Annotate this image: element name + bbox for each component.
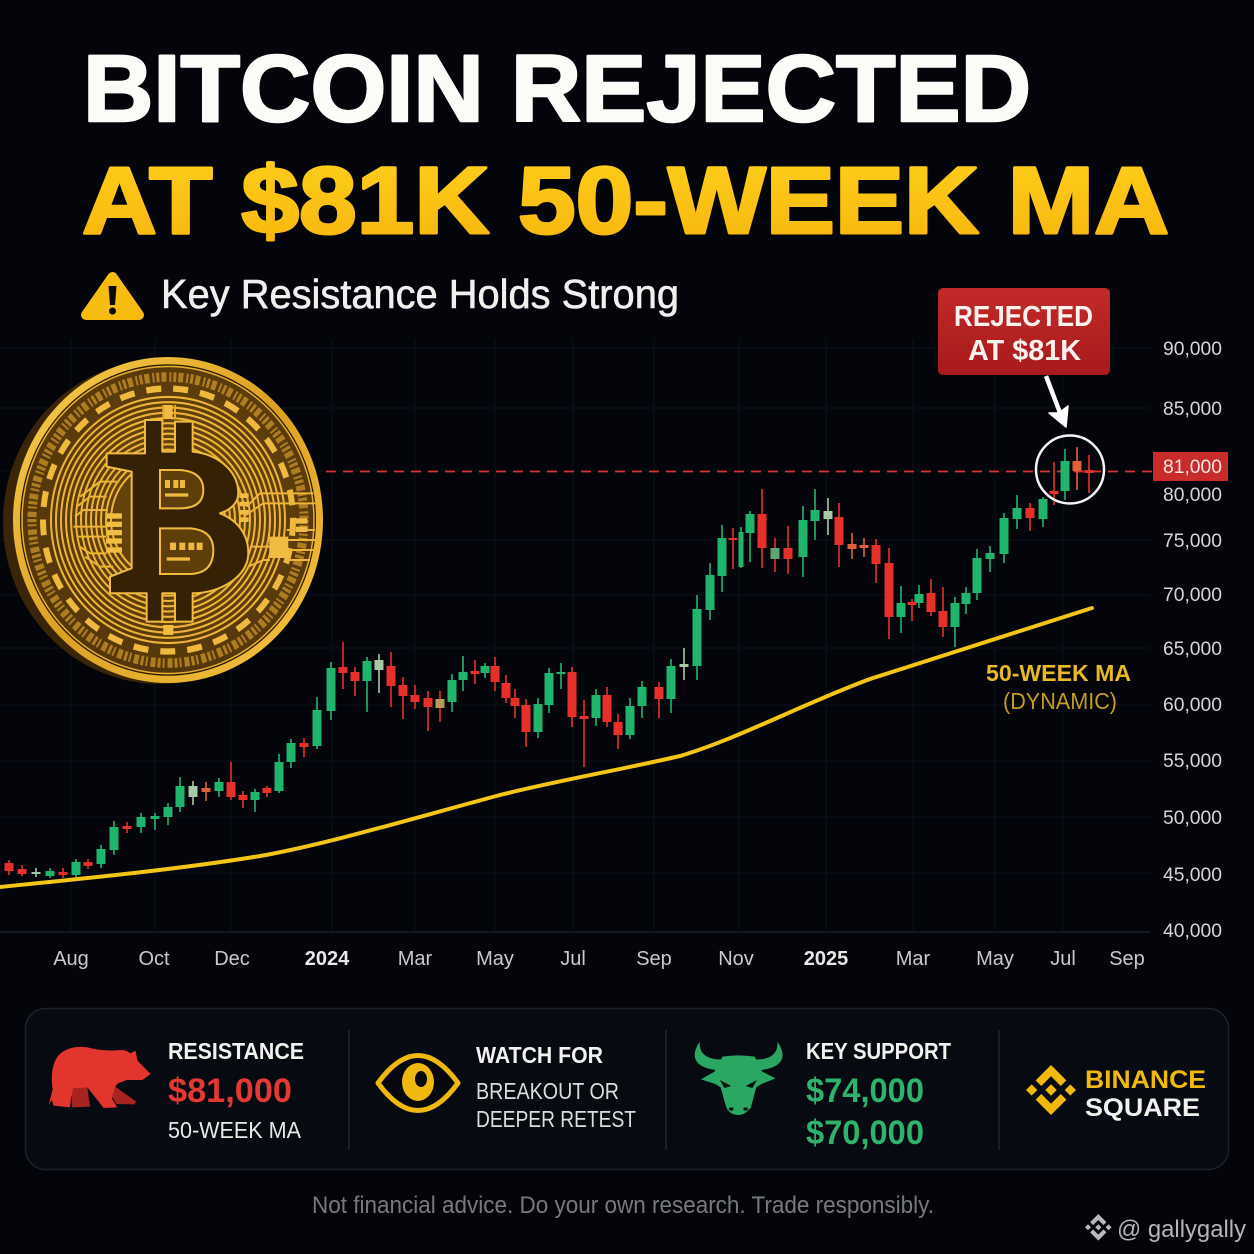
moving average label: 50-WEEK MA: [986, 660, 1131, 686]
y axis price labels: 80,000: [1163, 485, 1222, 506]
muted candles: [36, 498, 828, 877]
binance logo: [1026, 1065, 1076, 1115]
orange candles: [206, 447, 1077, 801]
y axis price labels: 60,000: [1163, 695, 1222, 716]
icon: green bull: [695, 1042, 783, 1115]
arrow to rejection: [1046, 376, 1068, 427]
watch for text: DEEPER RETEST: [476, 1106, 636, 1132]
price tag 81,000: 81,000: [1163, 457, 1222, 478]
disclaimer: Not financial advice. Do your own research. Trade responsibly.: [312, 1192, 934, 1219]
watch for text: WATCH FOR: [476, 1042, 603, 1068]
watch for text: BREAKOUT OR: [476, 1078, 619, 1104]
x axis time labels: Dec: [214, 948, 250, 970]
rejection circle: [1036, 436, 1104, 504]
y axis price labels: 85,000: [1163, 399, 1222, 420]
x axis time labels: Mar: [896, 948, 931, 970]
icon: warning triangle: [86, 277, 139, 315]
key support text: $70,000: [806, 1114, 924, 1152]
resistance text: 50-WEEK MA: [168, 1117, 302, 1143]
candlestick chart: [9, 447, 1089, 878]
resistance text: RESISTANCE: [168, 1038, 304, 1064]
binance square wordmark: [1085, 1066, 1206, 1122]
bitcoin coin: [3, 357, 323, 684]
y axis price labels: 70,000: [1163, 585, 1222, 606]
callout: rejected at $81K: AT $81K: [968, 335, 1081, 367]
icon: eye: [378, 1056, 458, 1110]
tan candle: [439, 691, 441, 722]
key support text: $74,000: [806, 1072, 924, 1110]
x axis time labels: Oct: [138, 948, 170, 970]
price tag 81,000: [1153, 452, 1228, 481]
y axis price labels: 45,000: [1163, 865, 1222, 886]
watch for text: [476, 1042, 636, 1132]
resistance text: $81,000: [168, 1072, 292, 1110]
x axis time labels: Aug: [53, 948, 89, 970]
stats panel: [26, 1008, 1228, 1170]
x axis time labels: Sep: [1109, 948, 1145, 970]
moving average label: (DYNAMIC): [1003, 688, 1117, 714]
moving average label: [986, 660, 1131, 714]
x axis time labels: May: [976, 948, 1014, 970]
y axis price labels: 90,000: [1163, 339, 1222, 360]
x axis time labels: May: [476, 948, 514, 970]
red candles: [9, 455, 1089, 878]
x axis time labels: 2024: [305, 948, 350, 970]
x axis time labels: Mar: [398, 948, 433, 970]
icon: red bear: [49, 1047, 151, 1108]
key support text: KEY SUPPORT: [806, 1038, 951, 1064]
key support text: [806, 1038, 951, 1152]
y axis price labels: 40,000: [1163, 921, 1222, 942]
title line 2: AT $81K 50-WEEK MA: [82, 148, 1169, 254]
y axis price labels: 55,000: [1163, 751, 1222, 772]
x axis time labels: Sep: [636, 948, 672, 970]
binance square wordmark: BINANCE: [1085, 1066, 1206, 1094]
watermark: @ gallygally: [1117, 1216, 1246, 1243]
x axis time labels: [53, 948, 1145, 970]
title line 1: BITCOIN REJECTED: [83, 36, 1031, 142]
x axis time labels: Nov: [718, 948, 754, 970]
y axis price labels: 50,000: [1163, 808, 1222, 829]
y axis price labels: 75,000: [1163, 531, 1222, 552]
y axis price labels: 65,000: [1163, 639, 1222, 660]
green candles: [50, 449, 1065, 878]
x axis time labels: Jul: [560, 948, 586, 970]
x axis time labels: Jul: [1050, 948, 1076, 970]
resistance dashed line at 81,000: [326, 470, 1153, 472]
binance square wordmark: SQUARE: [1085, 1094, 1200, 1122]
y axis price labels: [1163, 339, 1222, 942]
callout: rejected at $81K: [938, 288, 1110, 375]
x axis time labels: 2025: [804, 948, 848, 970]
50-week moving average line: [0, 608, 1092, 887]
subtitle: Key Resistance Holds Strong: [161, 271, 679, 317]
resistance text: [168, 1038, 304, 1143]
callout: rejected at $81K: REJECTED: [954, 301, 1093, 333]
muted green candle: [774, 538, 776, 572]
